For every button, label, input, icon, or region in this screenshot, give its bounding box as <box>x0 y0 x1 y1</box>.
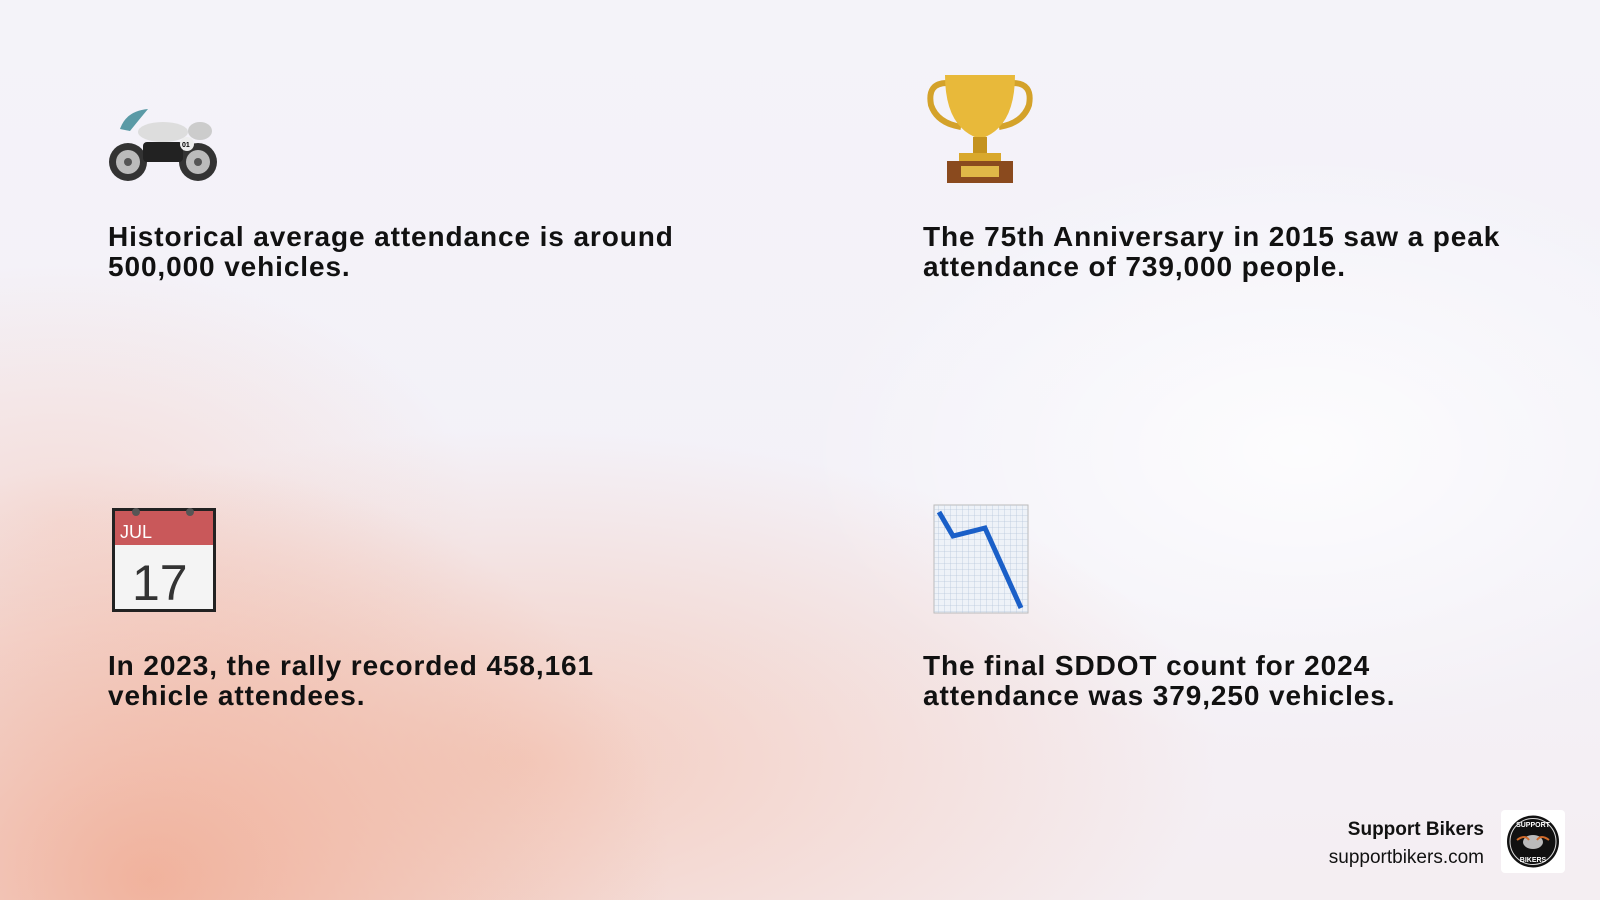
footer brand <box>1329 819 1484 868</box>
text: 2023: In 2023, the rally recorded 458,161 vehicle attendees. <box>108 650 594 711</box>
icon: motorcycle: 01 <box>182 142 190 149</box>
text: historical average: Historical average attendance is around 500,000 vehicles. <box>108 221 674 282</box>
logo: BIKERS <box>1520 857 1547 864</box>
logo <box>1501 810 1565 873</box>
logo: SUPPORT <box>1516 822 1551 829</box>
footer brand: supportbikers.com <box>1329 847 1484 868</box>
icon: trophy <box>927 75 1033 183</box>
icon: calendar <box>112 508 216 612</box>
icon: chart decreasing <box>934 504 1028 614</box>
text: 2024: The final SDDOT count for 2024 attendance was 379,250 vehicles. <box>923 650 1395 711</box>
icon: calendar: JUL <box>120 522 152 542</box>
text: 75th anniversary: The 75th Anniversary in 2015 saw a peak attendance of 739,000 people. <box>923 221 1500 282</box>
icon: motorcycle <box>109 109 217 181</box>
icon: calendar: 17 <box>132 555 188 611</box>
footer brand: Support Bikers <box>1348 819 1484 840</box>
